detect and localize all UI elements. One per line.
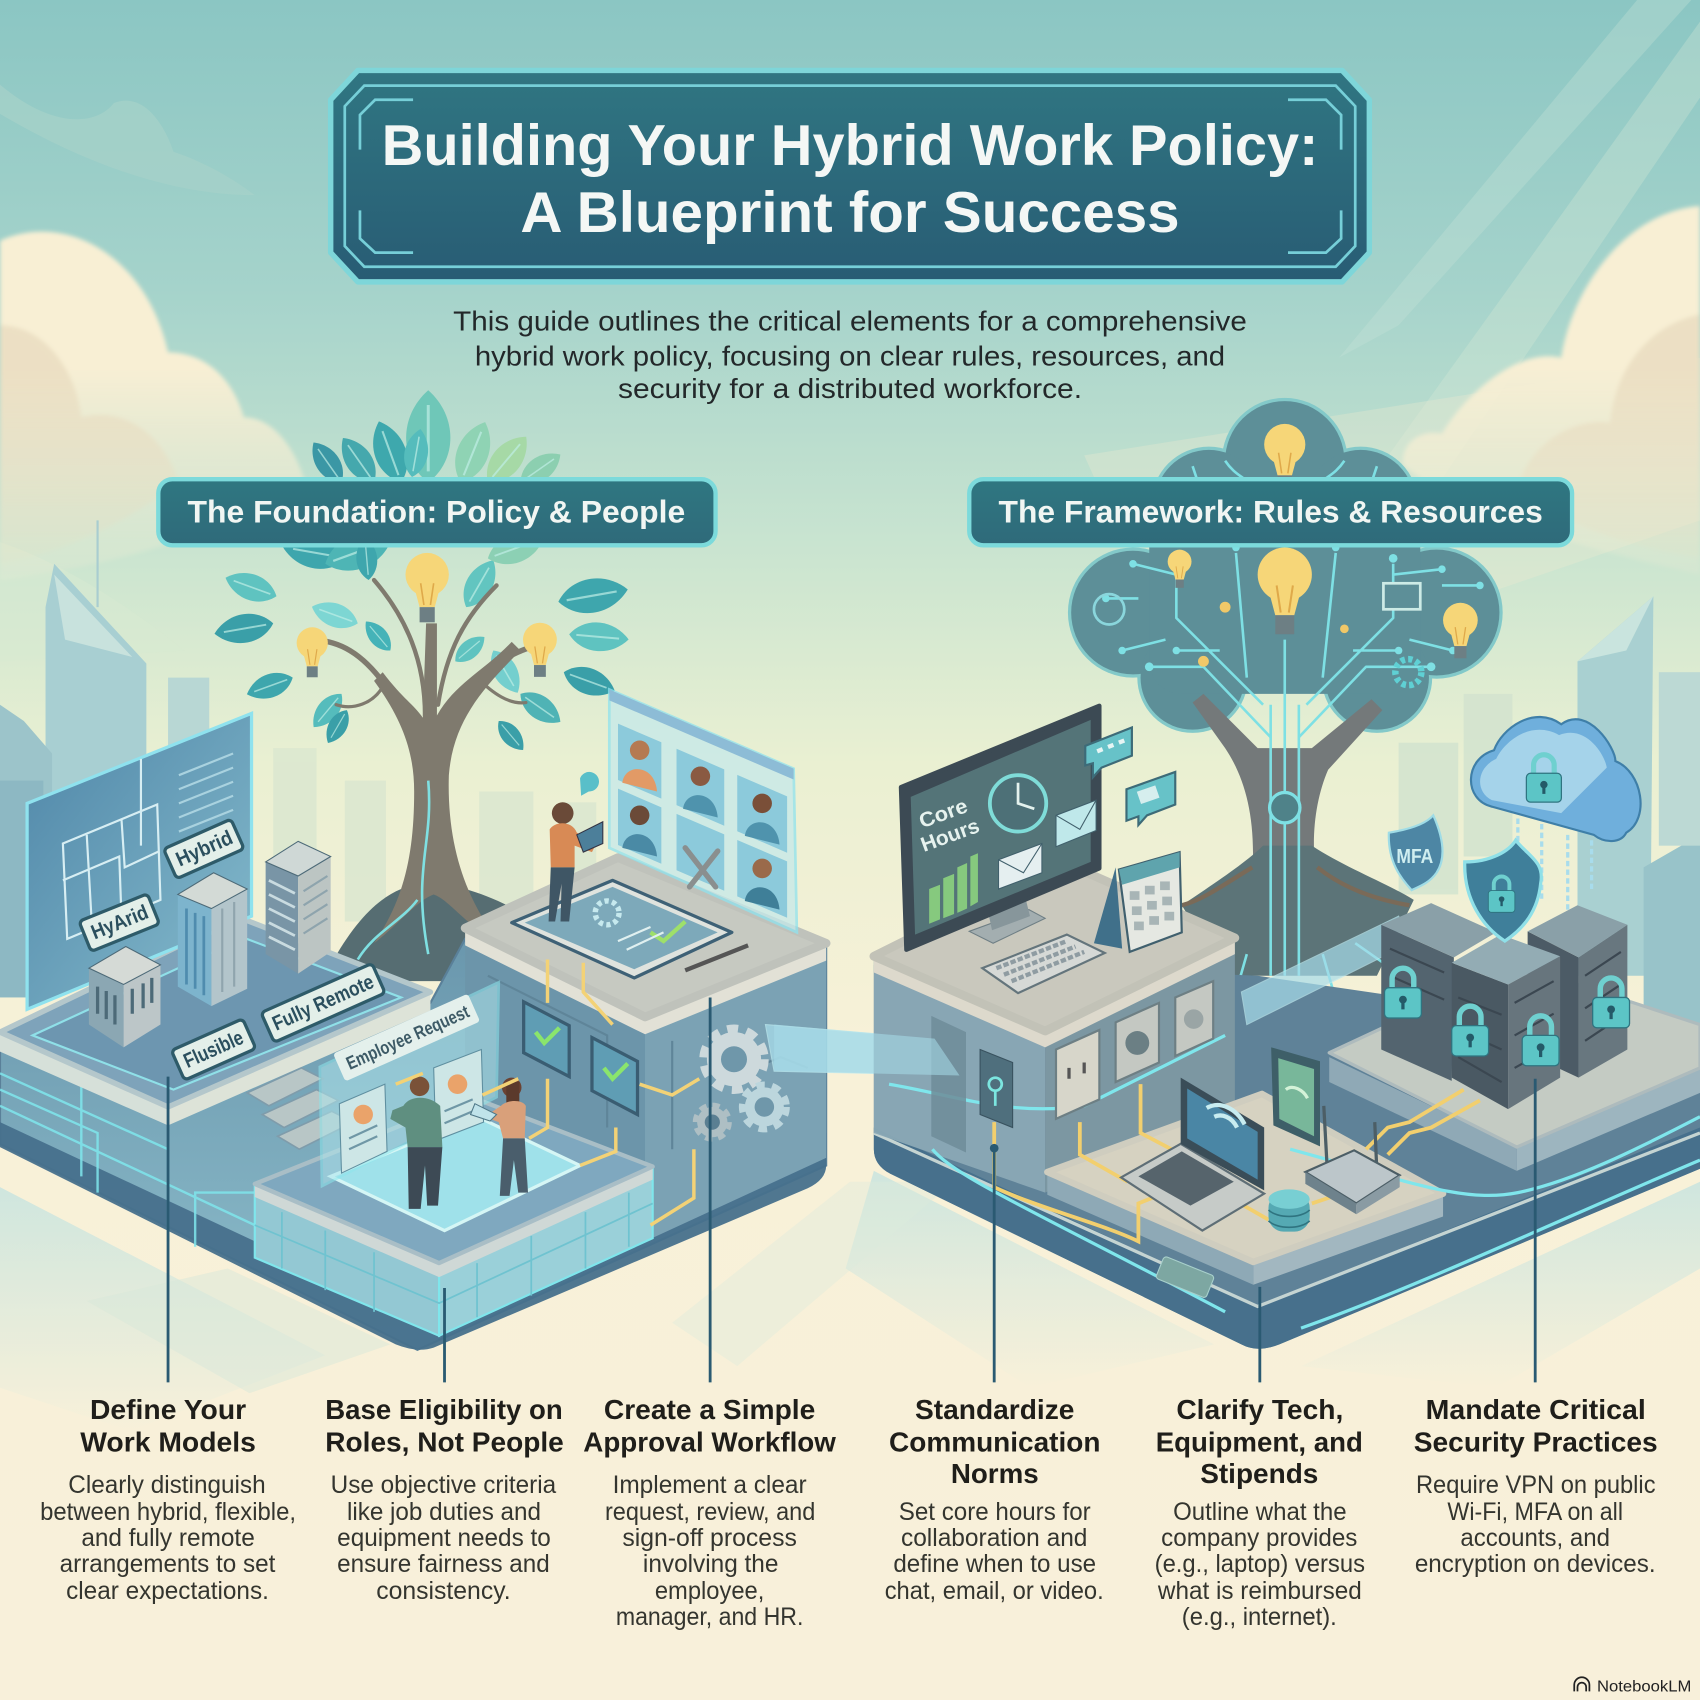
column 6: security practices: Mandate Critical (1426, 1393, 1646, 1425)
column 4: communication norms: Standardize (915, 1393, 1074, 1425)
left floating panel with floor plan (27, 713, 252, 1009)
column 4: communication norms (885, 1393, 1104, 1605)
buildings (89, 841, 331, 1047)
column 5: tech and stipends: Stipends (1200, 1457, 1318, 1489)
column 1: define your work models: Clearly distinguish (68, 1471, 266, 1499)
column 4: communication norms: define when to use (893, 1550, 1096, 1578)
column 3: approval workflow: Create a Simple (604, 1393, 815, 1425)
column 2: base eligibility: like job duties and (347, 1498, 541, 1526)
wall outlets (1056, 981, 1213, 1119)
column 3: approval workflow: Implement a clear (613, 1471, 807, 1499)
glass circuit lines (0, 997, 824, 1247)
column 6: security practices: encryption on devices. (1415, 1550, 1656, 1578)
circuits (1106, 461, 1480, 1084)
title banner (331, 70, 1369, 282)
column 3: approval workflow: involving the (643, 1550, 778, 1578)
column 5: tech and stipends: what is reimbursed (1157, 1577, 1362, 1605)
column 5: tech and stipends (1155, 1393, 1365, 1631)
column 2: base eligibility: Roles, Not People (325, 1426, 564, 1458)
intro text (453, 306, 1247, 404)
skyline left (0, 520, 596, 997)
column 1: define your work models: arrangements to set (60, 1550, 275, 1578)
person with laptop on block (549, 772, 603, 922)
section heading: foundation (158, 479, 716, 545)
roots (1182, 846, 1414, 976)
stairs (247, 1068, 353, 1149)
tree right: circuit tree (1068, 398, 1503, 1084)
bulbs on tree (297, 553, 557, 677)
tablet with wifi (1273, 1049, 1318, 1144)
wall key panel (931, 1016, 1013, 1152)
intro text: security for a distributed workforce. (618, 373, 1082, 404)
shield MFA: MFA (1396, 845, 1433, 868)
skyline right (1258, 596, 1700, 1030)
column 5: tech and stipends: Clarify Tech, (1176, 1393, 1343, 1425)
gears (697, 1032, 784, 1137)
column 4: communication norms: collaboration and (901, 1524, 1087, 1552)
monitor with core hours: Core (916, 794, 971, 833)
data coin stack (1268, 1189, 1310, 1232)
base silhouette (0, 939, 826, 1350)
left platform (0, 858, 960, 1350)
laptop with wifi (1121, 1078, 1264, 1231)
column 3: approval workflow: Approval Workflow (583, 1426, 836, 1458)
column 6: security practices: accounts, and (1460, 1524, 1610, 1552)
glass connector (765, 1025, 960, 1076)
column 5: tech and stipends: (e.g., internet). (1182, 1603, 1337, 1631)
monitor with core hours: Hours (918, 814, 983, 857)
server racks (1381, 903, 1630, 1109)
shield with lock (1465, 840, 1541, 941)
tree left: growing foundation (212, 390, 631, 981)
column 1: define your work models: and fully remote (81, 1524, 255, 1552)
approval check boxes and flow arrows (396, 960, 699, 1225)
column 1: define your work models (40, 1393, 296, 1605)
employee request glass panel: Employee Request (343, 1001, 472, 1074)
column 6: security practices: Require VPN on public (1416, 1471, 1656, 1499)
glowing base lines (889, 1035, 1700, 1328)
calendar (1094, 852, 1182, 952)
section heading: framework (969, 479, 1572, 545)
column 2: base eligibility: ensure fairness and (337, 1550, 550, 1578)
roots (331, 884, 575, 981)
leader lines (168, 997, 1535, 1382)
top foliage (304, 390, 567, 492)
base silhouette (874, 960, 1700, 1349)
front terrace (255, 1184, 439, 1336)
title text: Building Your Hybrid Work Policy: (382, 114, 1318, 178)
column 1: define your work models: clear expectations. (66, 1577, 269, 1605)
column 4: communication norms: Norms (951, 1457, 1039, 1489)
keyboard (982, 935, 1105, 993)
column 1: define your work models: Define Your (90, 1393, 246, 1425)
floating video call panel (609, 690, 797, 932)
middle terrace (1047, 1172, 1253, 1285)
shield MFA (1389, 815, 1443, 890)
column 6: security practices: Security Practices (1414, 1426, 1658, 1458)
column 1: define your work models: Work Models (80, 1426, 256, 1458)
column 3: approval workflow: employee, (655, 1577, 764, 1605)
column 5: tech and stipends: company provides (1161, 1524, 1357, 1552)
block faces (874, 965, 1045, 1193)
column 5: tech and stipends: (e.g., laptop) versus (1155, 1550, 1365, 1578)
section heading: foundation: The Foundation: Policy & People (188, 495, 685, 530)
cloud left (0, 232, 305, 580)
column 2: base eligibility: Base Eligibility on (325, 1393, 563, 1425)
base slab (874, 1128, 1700, 1349)
cloud with lock (1471, 717, 1641, 911)
column 1: define your work models: between hybrid, flexible, (40, 1498, 296, 1526)
floating model labels (79, 819, 385, 1080)
column 2: base eligibility: Use objective criteria (331, 1471, 556, 1499)
upper left terrace (0, 1032, 168, 1125)
column 4: communication norms: Communication (889, 1426, 1100, 1458)
trunk (1193, 694, 1382, 889)
router (1305, 1106, 1400, 1214)
monitor with core hours (901, 706, 1175, 950)
dark base slab (0, 1122, 826, 1350)
column 6: security practices: Wi-Fi, MFA on all (1447, 1498, 1623, 1526)
column 5: tech and stipends: Outline what the (1173, 1498, 1347, 1526)
floating model labels: Flusible (180, 1026, 247, 1073)
lower leaves (212, 524, 631, 756)
lower terrace (1329, 1057, 1517, 1171)
NotebookLM watermark: NotebookLM (1597, 1678, 1691, 1695)
intro text: hybrid work policy, focusing on clear rules, resources, and (475, 340, 1225, 371)
trunk (374, 623, 520, 943)
circuit bulbs (1094, 424, 1478, 685)
title text: A Blueprint for Success (520, 181, 1180, 245)
column 4: communication norms: Set core hours for (899, 1498, 1091, 1526)
two people at request panel (390, 1077, 528, 1209)
employee request glass panel (320, 982, 499, 1186)
section heading: framework: The Framework: Rules & Resources (999, 495, 1543, 530)
column 3: approval workflow: request, review, and (605, 1498, 815, 1526)
floating model labels: Hybrid (172, 826, 236, 871)
right platform (774, 862, 1700, 1349)
column 2: base eligibility (325, 1393, 564, 1605)
ground shadows (0, 1171, 1700, 1431)
block faces (465, 939, 645, 1182)
tablet approval screen (512, 880, 748, 978)
column 3: approval workflow: manager, and HR. (616, 1603, 803, 1631)
column 3: approval workflow: sign-off process (622, 1524, 797, 1552)
column 2: base eligibility: equipment needs to (337, 1524, 551, 1552)
column 2: base eligibility: consistency. (376, 1577, 511, 1605)
column 3: approval workflow (583, 1393, 836, 1631)
cloud right (1403, 206, 1700, 575)
intro text: This guide outlines the critical elements for a comprehensive (453, 306, 1247, 337)
column 4: communication norms: chat, email, or video. (885, 1577, 1104, 1605)
column 6: security practices (1414, 1393, 1658, 1578)
floating model labels: Fully Remote (269, 970, 377, 1035)
padlocks (1385, 968, 1630, 1066)
block top (465, 928, 826, 1034)
column 5: tech and stipends: Equipment, and (1156, 1426, 1363, 1458)
floating model labels: HyArid (88, 901, 152, 944)
